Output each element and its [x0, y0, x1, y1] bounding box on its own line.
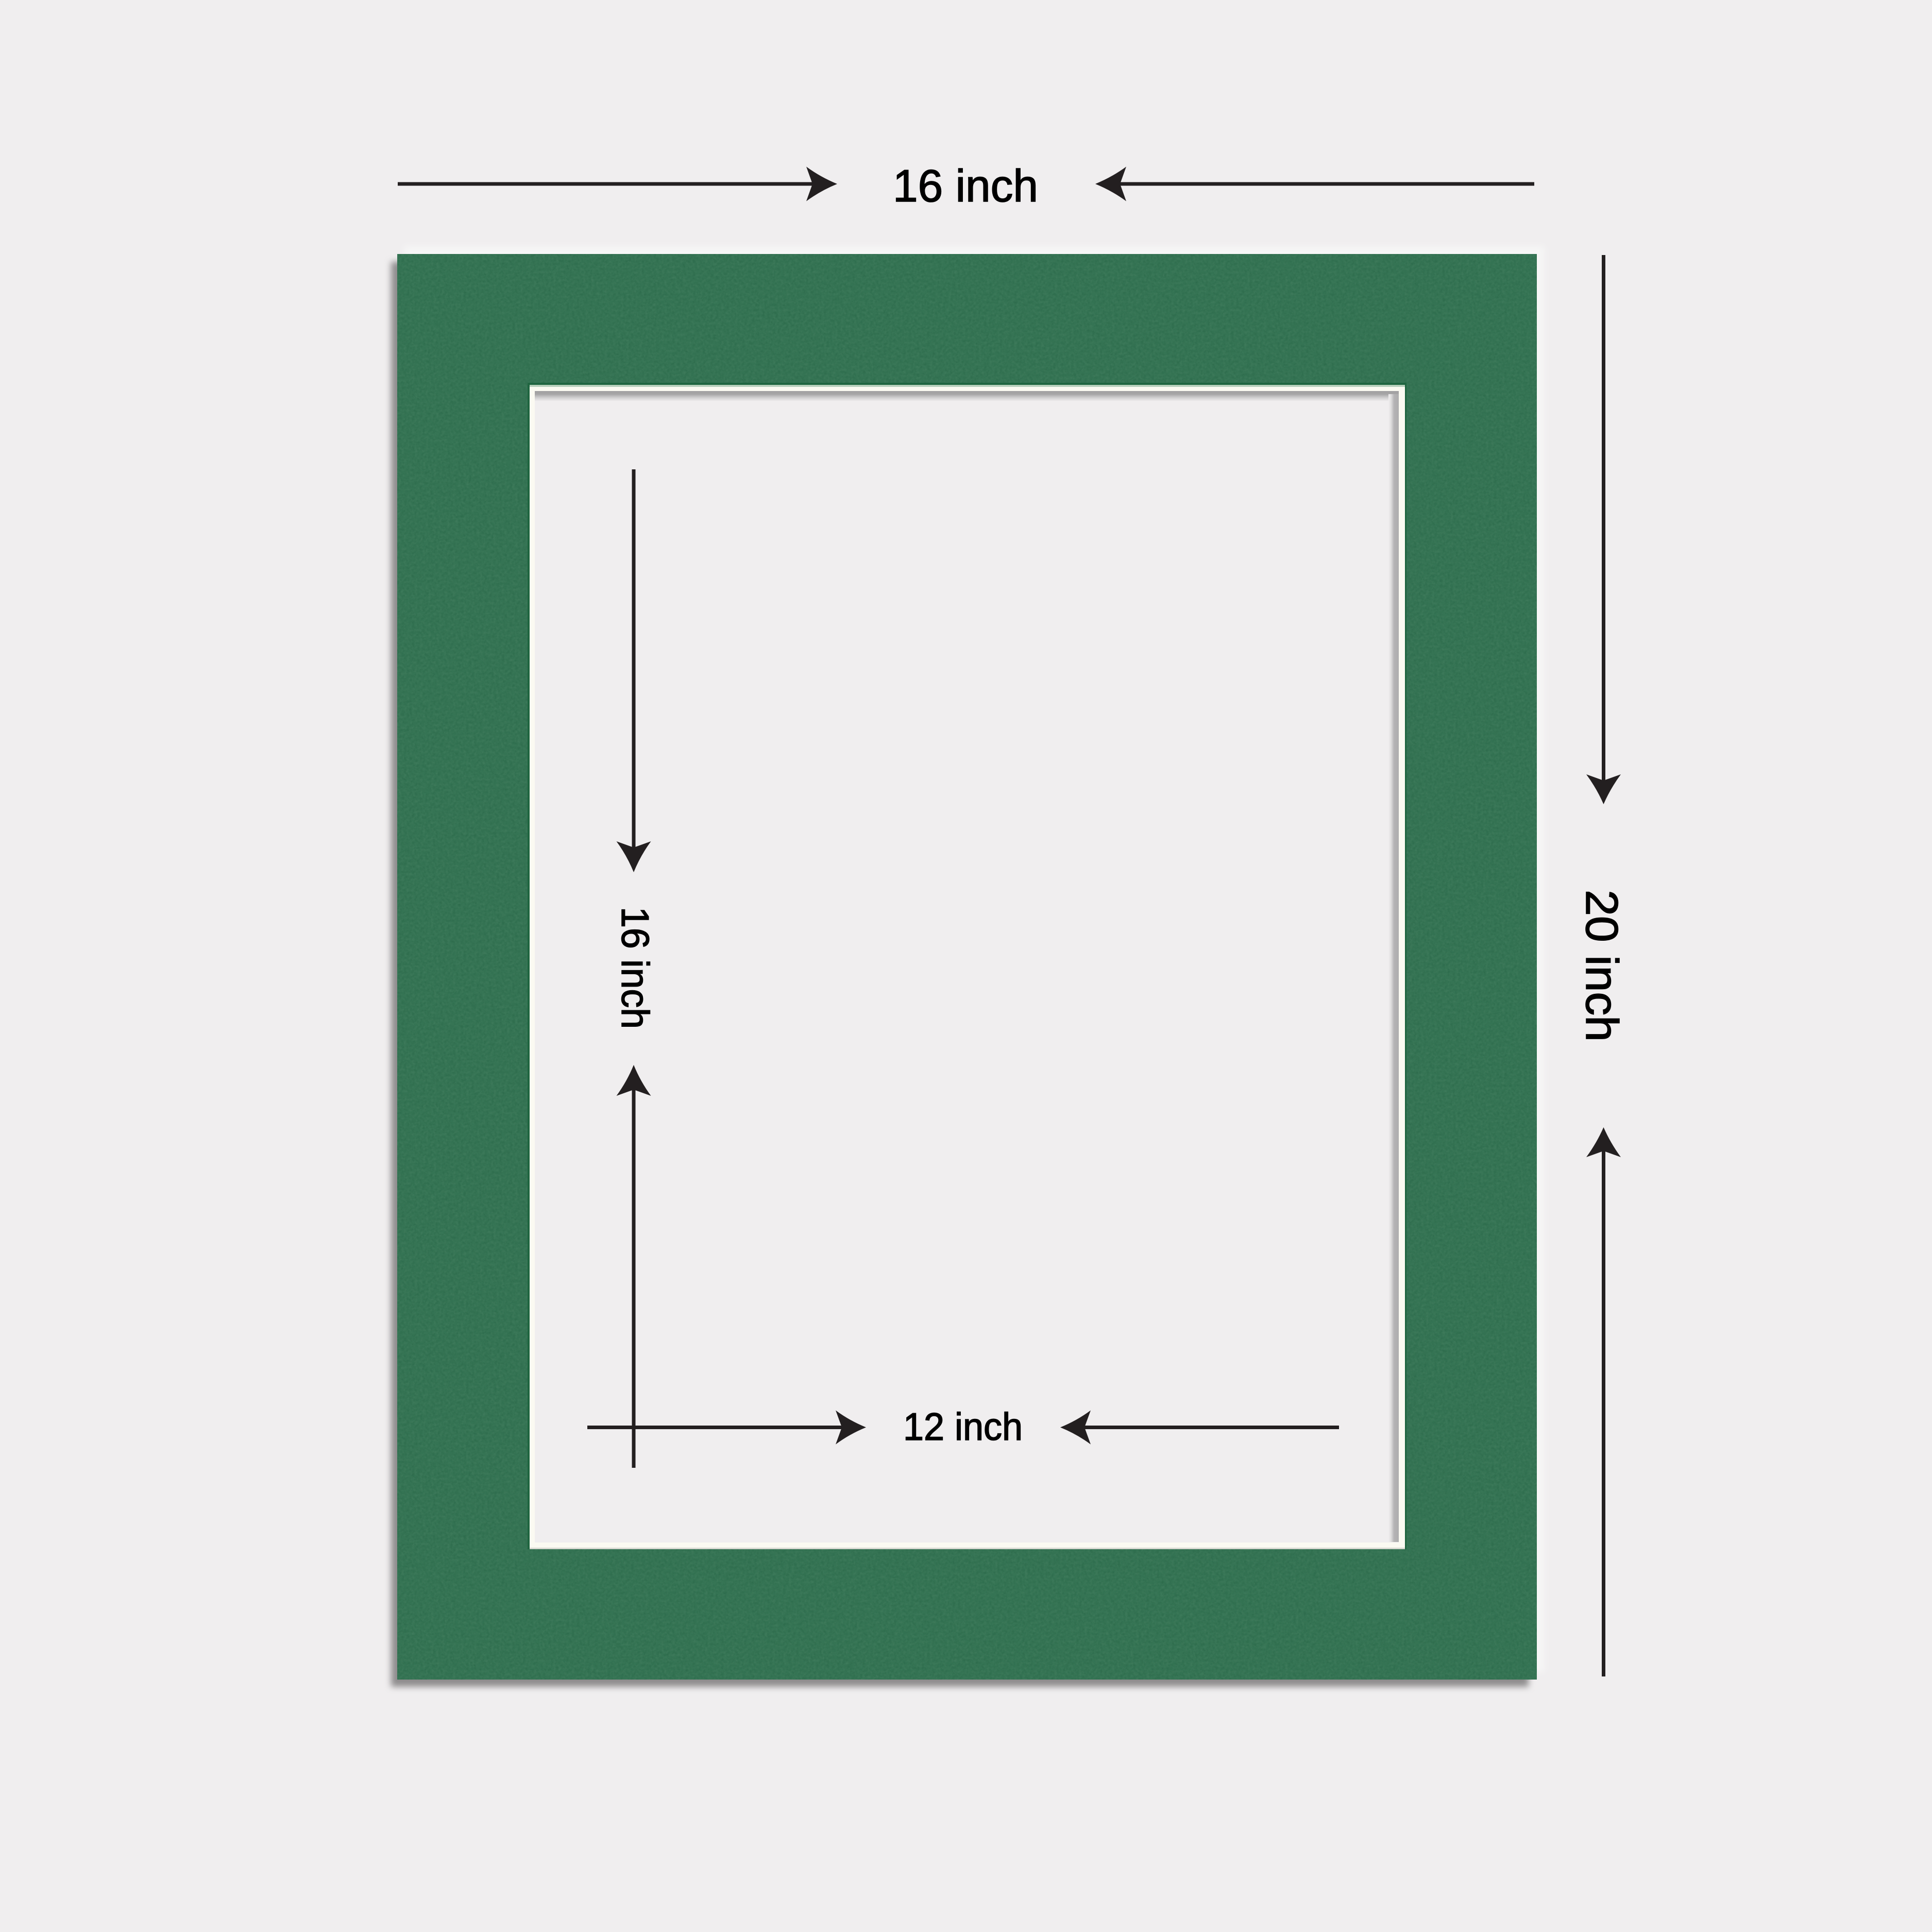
arrow: bottom pointing up	[1586, 1127, 1621, 1676]
arrow: top pointing down	[1586, 255, 1621, 804]
arrow: right pointing left	[1095, 167, 1534, 201]
panel: green mat board	[391, 246, 1544, 1687]
dimension: window width 12 inch	[587, 1405, 1339, 1448]
arrow: left pointing right	[587, 1411, 866, 1445]
dimension: overall width 16 inch	[398, 160, 1534, 211]
arrow: top pointing down	[616, 469, 651, 872]
dimension: window height 16 inch	[614, 469, 657, 1468]
inner right shadow	[1388, 394, 1399, 1542]
arrow: left pointing right	[398, 167, 837, 201]
label: 12 inch: 12 inch	[903, 1405, 1023, 1448]
window opening with cream bevel	[530, 385, 1405, 1549]
mat paper grain	[397, 254, 1537, 1680]
label: 16 inch vertical: 16 inch	[614, 907, 657, 1029]
label: 16 inch: 16 inch	[893, 160, 1038, 211]
arrow: right pointing left	[1060, 1411, 1339, 1445]
dimension: overall height 20 inch	[1577, 255, 1628, 1676]
mat light halo	[404, 246, 1544, 1672]
arrow: bottom pointing up	[616, 1065, 651, 1468]
inner top shadow	[535, 391, 1399, 401]
mat surface	[397, 254, 1537, 1680]
mat drop shadow	[391, 262, 1529, 1687]
label: 20 inch: 20 inch	[1577, 890, 1628, 1042]
window cut edge	[528, 383, 1406, 1549]
